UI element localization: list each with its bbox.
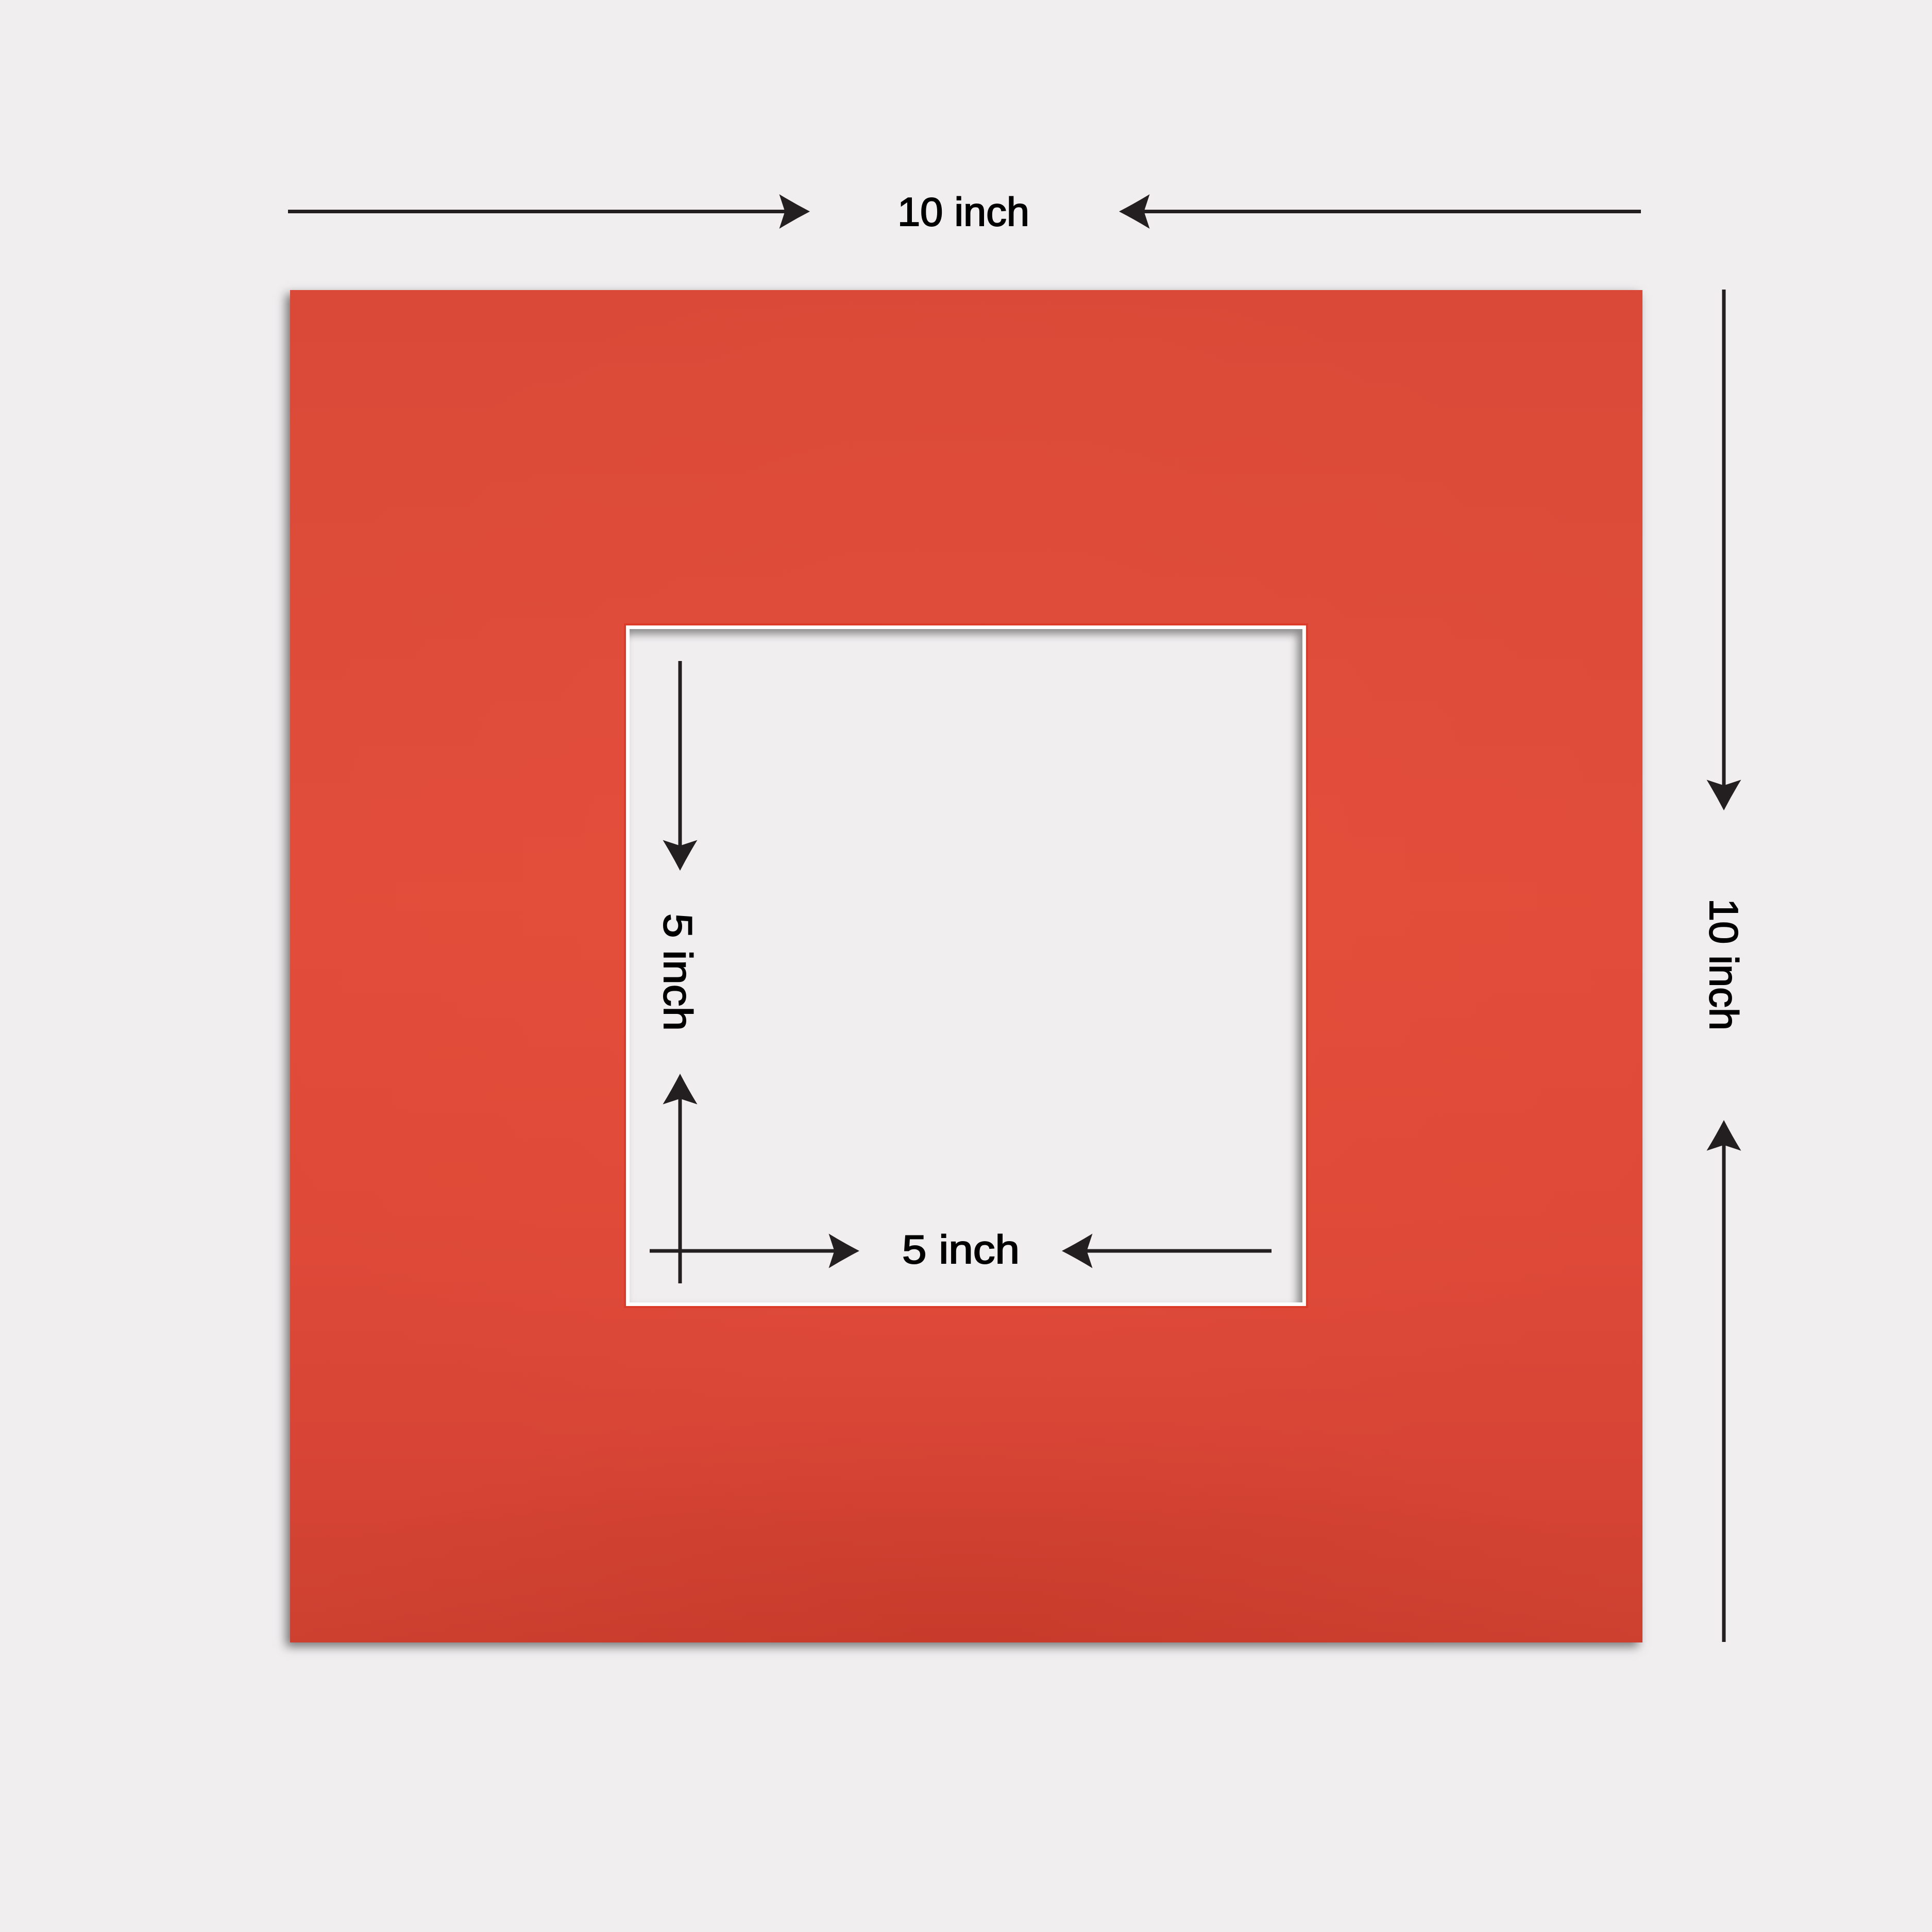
arrow: top right pointing left <box>1119 194 1641 229</box>
label: inner left 5 inch: 5 inch <box>655 913 701 1031</box>
arrow: inner bottom pointing right <box>650 1233 859 1268</box>
dimension: outer height 10 inch <box>1701 290 1747 1642</box>
arrow: top left pointing right <box>288 194 810 229</box>
dimension: opening width 5 inch <box>650 1227 1272 1272</box>
label: right 10 inch: 10 inch <box>1701 899 1747 1030</box>
arrow: inner left pointing up <box>663 1074 698 1283</box>
arrow: inner bottom pointing left <box>1062 1233 1272 1268</box>
arrow: right side pointing up <box>1706 1120 1741 1642</box>
window: 5 inch square cut-out opening <box>626 625 1306 1306</box>
panel: red mat board frame <box>290 290 1642 1642</box>
label: inner bottom 5 inch: 5 inch <box>902 1227 1020 1272</box>
label: top 10 inch: 10 inch <box>897 189 1029 234</box>
arrow: inner left pointing down <box>663 661 698 871</box>
dimension: opening height 5 inch <box>655 661 701 1283</box>
dimension: outer width 10 inch <box>288 189 1641 234</box>
arrow: right side pointing down <box>1706 290 1741 810</box>
